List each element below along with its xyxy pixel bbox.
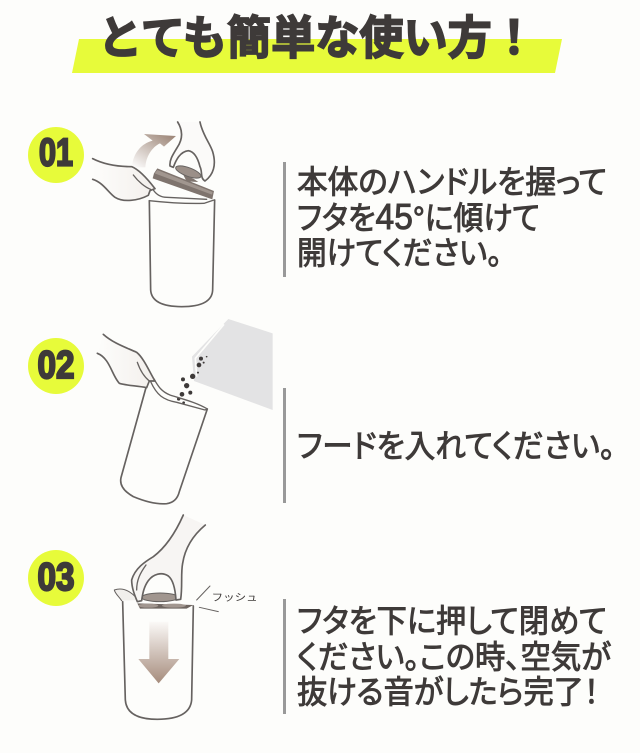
- step 1 text: フタを45°に傾けて: [297, 196, 540, 237]
- handle: [114, 589, 138, 601]
- label: フッシュ: [212, 593, 258, 604]
- jar: [149, 200, 215, 307]
- arrow: [138, 622, 179, 683]
- jar: [121, 388, 207, 504]
- illustration: close lid: [114, 515, 258, 719]
- hand: [97, 334, 155, 388]
- divider bar: [283, 388, 286, 503]
- number badge 03: [28, 550, 84, 606]
- knob: [142, 593, 178, 602]
- number badge 01: 01: [39, 132, 73, 174]
- step 1 text: 本体のハンドルを握って: [297, 164, 607, 200]
- lid: [153, 168, 214, 199]
- number badge 02: 02: [38, 344, 74, 387]
- lower hand: [93, 159, 155, 200]
- illustration: pour food: [97, 319, 273, 504]
- food bag: [192, 319, 273, 410]
- bag opening: [195, 324, 224, 377]
- step 3 text: ください。この時、空気が: [297, 639, 612, 675]
- banner highlight: [72, 39, 562, 73]
- title banner: [72, 2, 562, 73]
- step 3 text: フタを下に押して閉めて: [297, 603, 607, 639]
- step 3: [28, 515, 612, 719]
- lid: [137, 603, 193, 609]
- finger line: [133, 175, 151, 189]
- rim and handle: [151, 379, 207, 410]
- step 2 text: フードを入れてください。: [297, 428, 615, 464]
- number badge 02: [28, 338, 84, 394]
- arrow: [132, 134, 176, 167]
- food pieces: [177, 356, 207, 404]
- title text: とても簡単な使い方！: [98, 2, 536, 68]
- jar: [123, 602, 193, 719]
- divider bar: [283, 162, 286, 277]
- illustration: open lid: [93, 122, 215, 307]
- hand: [132, 515, 205, 602]
- upper hand: [170, 122, 214, 181]
- divider bar: [283, 599, 286, 714]
- air lines: [197, 586, 218, 612]
- lid knob: [174, 163, 202, 182]
- number badge 03: 03: [38, 556, 74, 599]
- step 3 text: [297, 603, 612, 710]
- finger line: [137, 362, 149, 381]
- step 1 text: [297, 164, 607, 271]
- step 3 text: 抜ける音がしたら完了！: [297, 674, 599, 710]
- step 1: [28, 122, 607, 307]
- handle: [149, 190, 214, 203]
- step 2: [28, 319, 615, 504]
- finger line: [137, 565, 146, 590]
- number badge 01: [28, 127, 84, 183]
- step 1 text: 開けてください。: [297, 235, 502, 271]
